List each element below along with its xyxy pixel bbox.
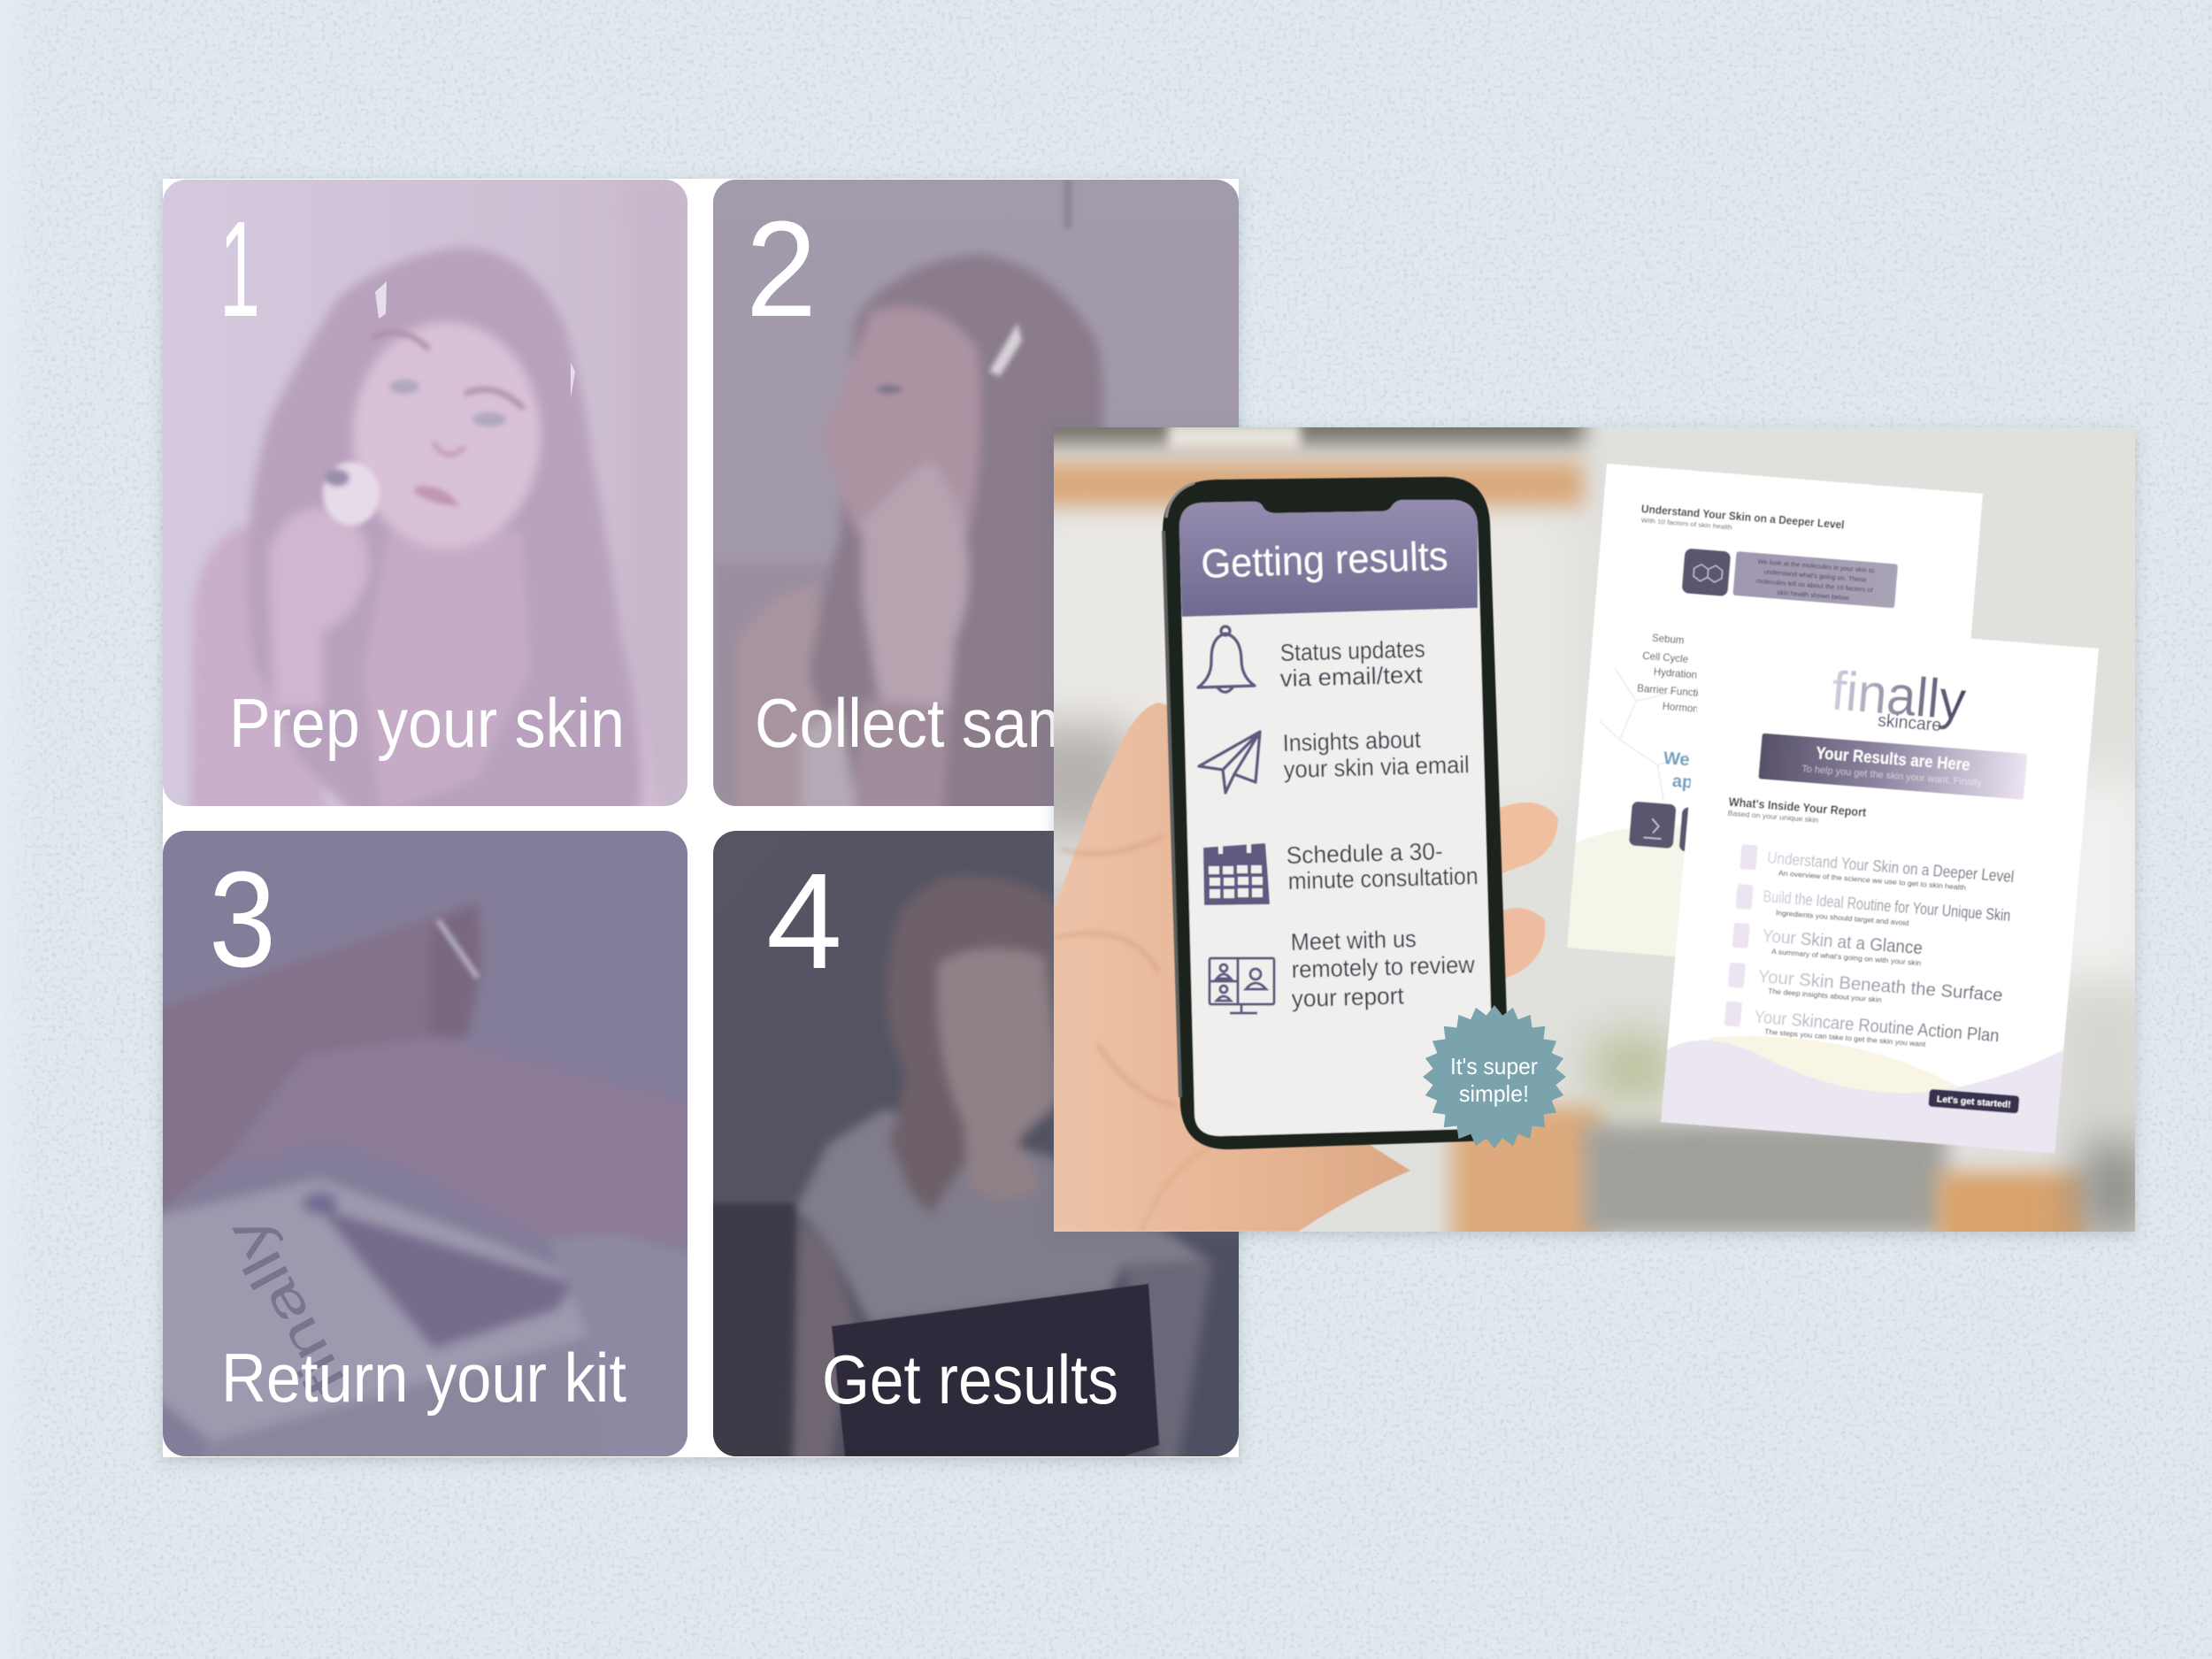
banner: your results are here: To help you get the skin your want. Finally <box>1801 764 1982 788</box>
row: status updates: via email/text <box>1279 661 1424 692</box>
back page blue heading <box>1661 749 1725 795</box>
label: prep your skin: Prep your skin <box>229 684 625 762</box>
factor labels: Sebum <box>1652 634 1685 647</box>
row: schedule <box>1286 838 1479 895</box>
badge: it's super simple <box>1423 1005 1566 1148</box>
phone header band <box>1179 500 1478 617</box>
report contents list <box>1724 844 2015 1055</box>
row: schedule: minute consultation <box>1287 863 1479 895</box>
step number 2: 2 <box>746 193 817 345</box>
panel: photo of hand holding phone with report pages <box>1018 389 2150 1256</box>
icon: paper plane <box>1199 732 1260 793</box>
label: collect samples: Collect samples <box>755 684 1193 762</box>
back page blue heading: We use <box>1663 749 1725 773</box>
report contents list: A summary of what's going on with your skin <box>1771 947 1922 967</box>
row: meet with us <box>1290 926 1476 1012</box>
back page blue heading: apply <box>1671 772 1720 795</box>
row: insights <box>1282 726 1470 783</box>
back page callout box: understand what's going on. These <box>1763 568 1867 584</box>
logo: finally skincare: skincare <box>1877 711 1942 735</box>
button: let's get started <box>1928 1089 2020 1114</box>
back page callout box: molecules tell us about the 10 factors of <box>1755 577 1874 594</box>
factor labels: Cell Cycle <box>1642 651 1688 665</box>
report contents list: Your Skincare Routine Action Plan <box>1754 1008 2000 1047</box>
panel: four step cards on white <box>150 179 1239 1469</box>
report page: your results are here (front) <box>1661 618 2099 1153</box>
row: meet with us: Meet with us <box>1290 926 1417 956</box>
molecule network <box>1593 667 1696 803</box>
factor labels <box>1635 633 1716 716</box>
back page title: Understand Your Skin on a Deeper Level <box>1640 503 1845 532</box>
report contents list: Ingredients you should target and avoid <box>1776 908 1909 927</box>
factor labels: Barrier Function <box>1637 684 1709 700</box>
row: insights: Insights about <box>1282 726 1422 757</box>
row: meet with us: your report <box>1291 982 1405 1012</box>
icon: microscope tile <box>1629 801 1677 849</box>
factor labels: Hormones <box>1662 702 1709 716</box>
report contents list: Your Skin Beneath the Surface <box>1757 967 2003 1006</box>
report contents list: An overview of the science we use to get to skin health <box>1778 868 1967 892</box>
row: schedule: Schedule a 30- <box>1286 838 1443 869</box>
label: return your kit: Return your kit <box>221 1339 626 1417</box>
icon: calendar <box>1203 840 1270 905</box>
card 4: get results <box>699 831 1239 1469</box>
row: status updates <box>1279 635 1425 692</box>
back page callout box: We look at the molecules in your skin to <box>1757 557 1875 574</box>
phone screen <box>1179 500 1494 1136</box>
report contents list: The steps you can take to get the skin you want <box>1764 1027 1926 1048</box>
row: meet with us: remotely to review <box>1291 951 1476 983</box>
blurred room backdrop <box>1018 389 2150 1256</box>
phone <box>1163 477 1509 1149</box>
step number 1: 1 <box>219 193 260 345</box>
back page callout box: skin health shown below. <box>1777 588 1851 602</box>
badge: it's super simple: It's super <box>1450 1053 1538 1079</box>
icon: molecule <box>1681 548 1731 596</box>
row: insights: your skin via email <box>1283 751 1470 783</box>
card 3: return your kit: finally <box>215 1209 357 1405</box>
icon: video call monitor <box>1210 958 1274 1013</box>
icon: bell <box>1198 626 1255 692</box>
label: get results: Get results <box>822 1340 1118 1418</box>
row: status updates: Status updates <box>1279 635 1425 666</box>
page waves <box>1661 1018 2063 1153</box>
second icon tile <box>1678 807 1726 855</box>
report contents list: The deep insights about your skin <box>1768 987 1882 1004</box>
report contents list: Understand Your Skin on a Deeper Level <box>1767 849 2015 886</box>
phone body <box>1163 477 1509 1149</box>
card 3: return your kit <box>150 831 699 1469</box>
banner: your results are here: Your Results are Here <box>1815 744 1970 775</box>
back page callout box <box>1732 551 1898 608</box>
report page: understand your skin (back) <box>1567 464 1983 978</box>
heading: getting results: Getting results <box>1201 533 1448 587</box>
back page subtitle: With 10 factors of skin health <box>1641 516 1732 531</box>
step number 4: 4 <box>766 845 842 997</box>
banner: your results are here <box>1758 733 2027 800</box>
badge: it's super simple: simple! <box>1459 1080 1529 1107</box>
factor labels: Hydration <box>1653 667 1697 681</box>
back page cream wave <box>1567 790 1956 978</box>
logo: finally skincare: finally <box>1829 661 1968 732</box>
report contents list: Your Skin at a Glance <box>1762 926 1924 958</box>
report contents list: Build the Ideal Routine for Your Unique Skin <box>1763 887 2011 925</box>
card 1: prep your skin <box>163 180 687 823</box>
heading: what's inside: What's Inside Your Report <box>1728 795 1867 819</box>
button: let's get started: Let's get started! <box>1936 1094 2011 1110</box>
hand <box>1053 703 1558 1232</box>
subheading: Based on your unique skin <box>1727 810 1819 825</box>
step number 3: 3 <box>209 843 276 995</box>
card 2: collect samples <box>713 180 1239 823</box>
